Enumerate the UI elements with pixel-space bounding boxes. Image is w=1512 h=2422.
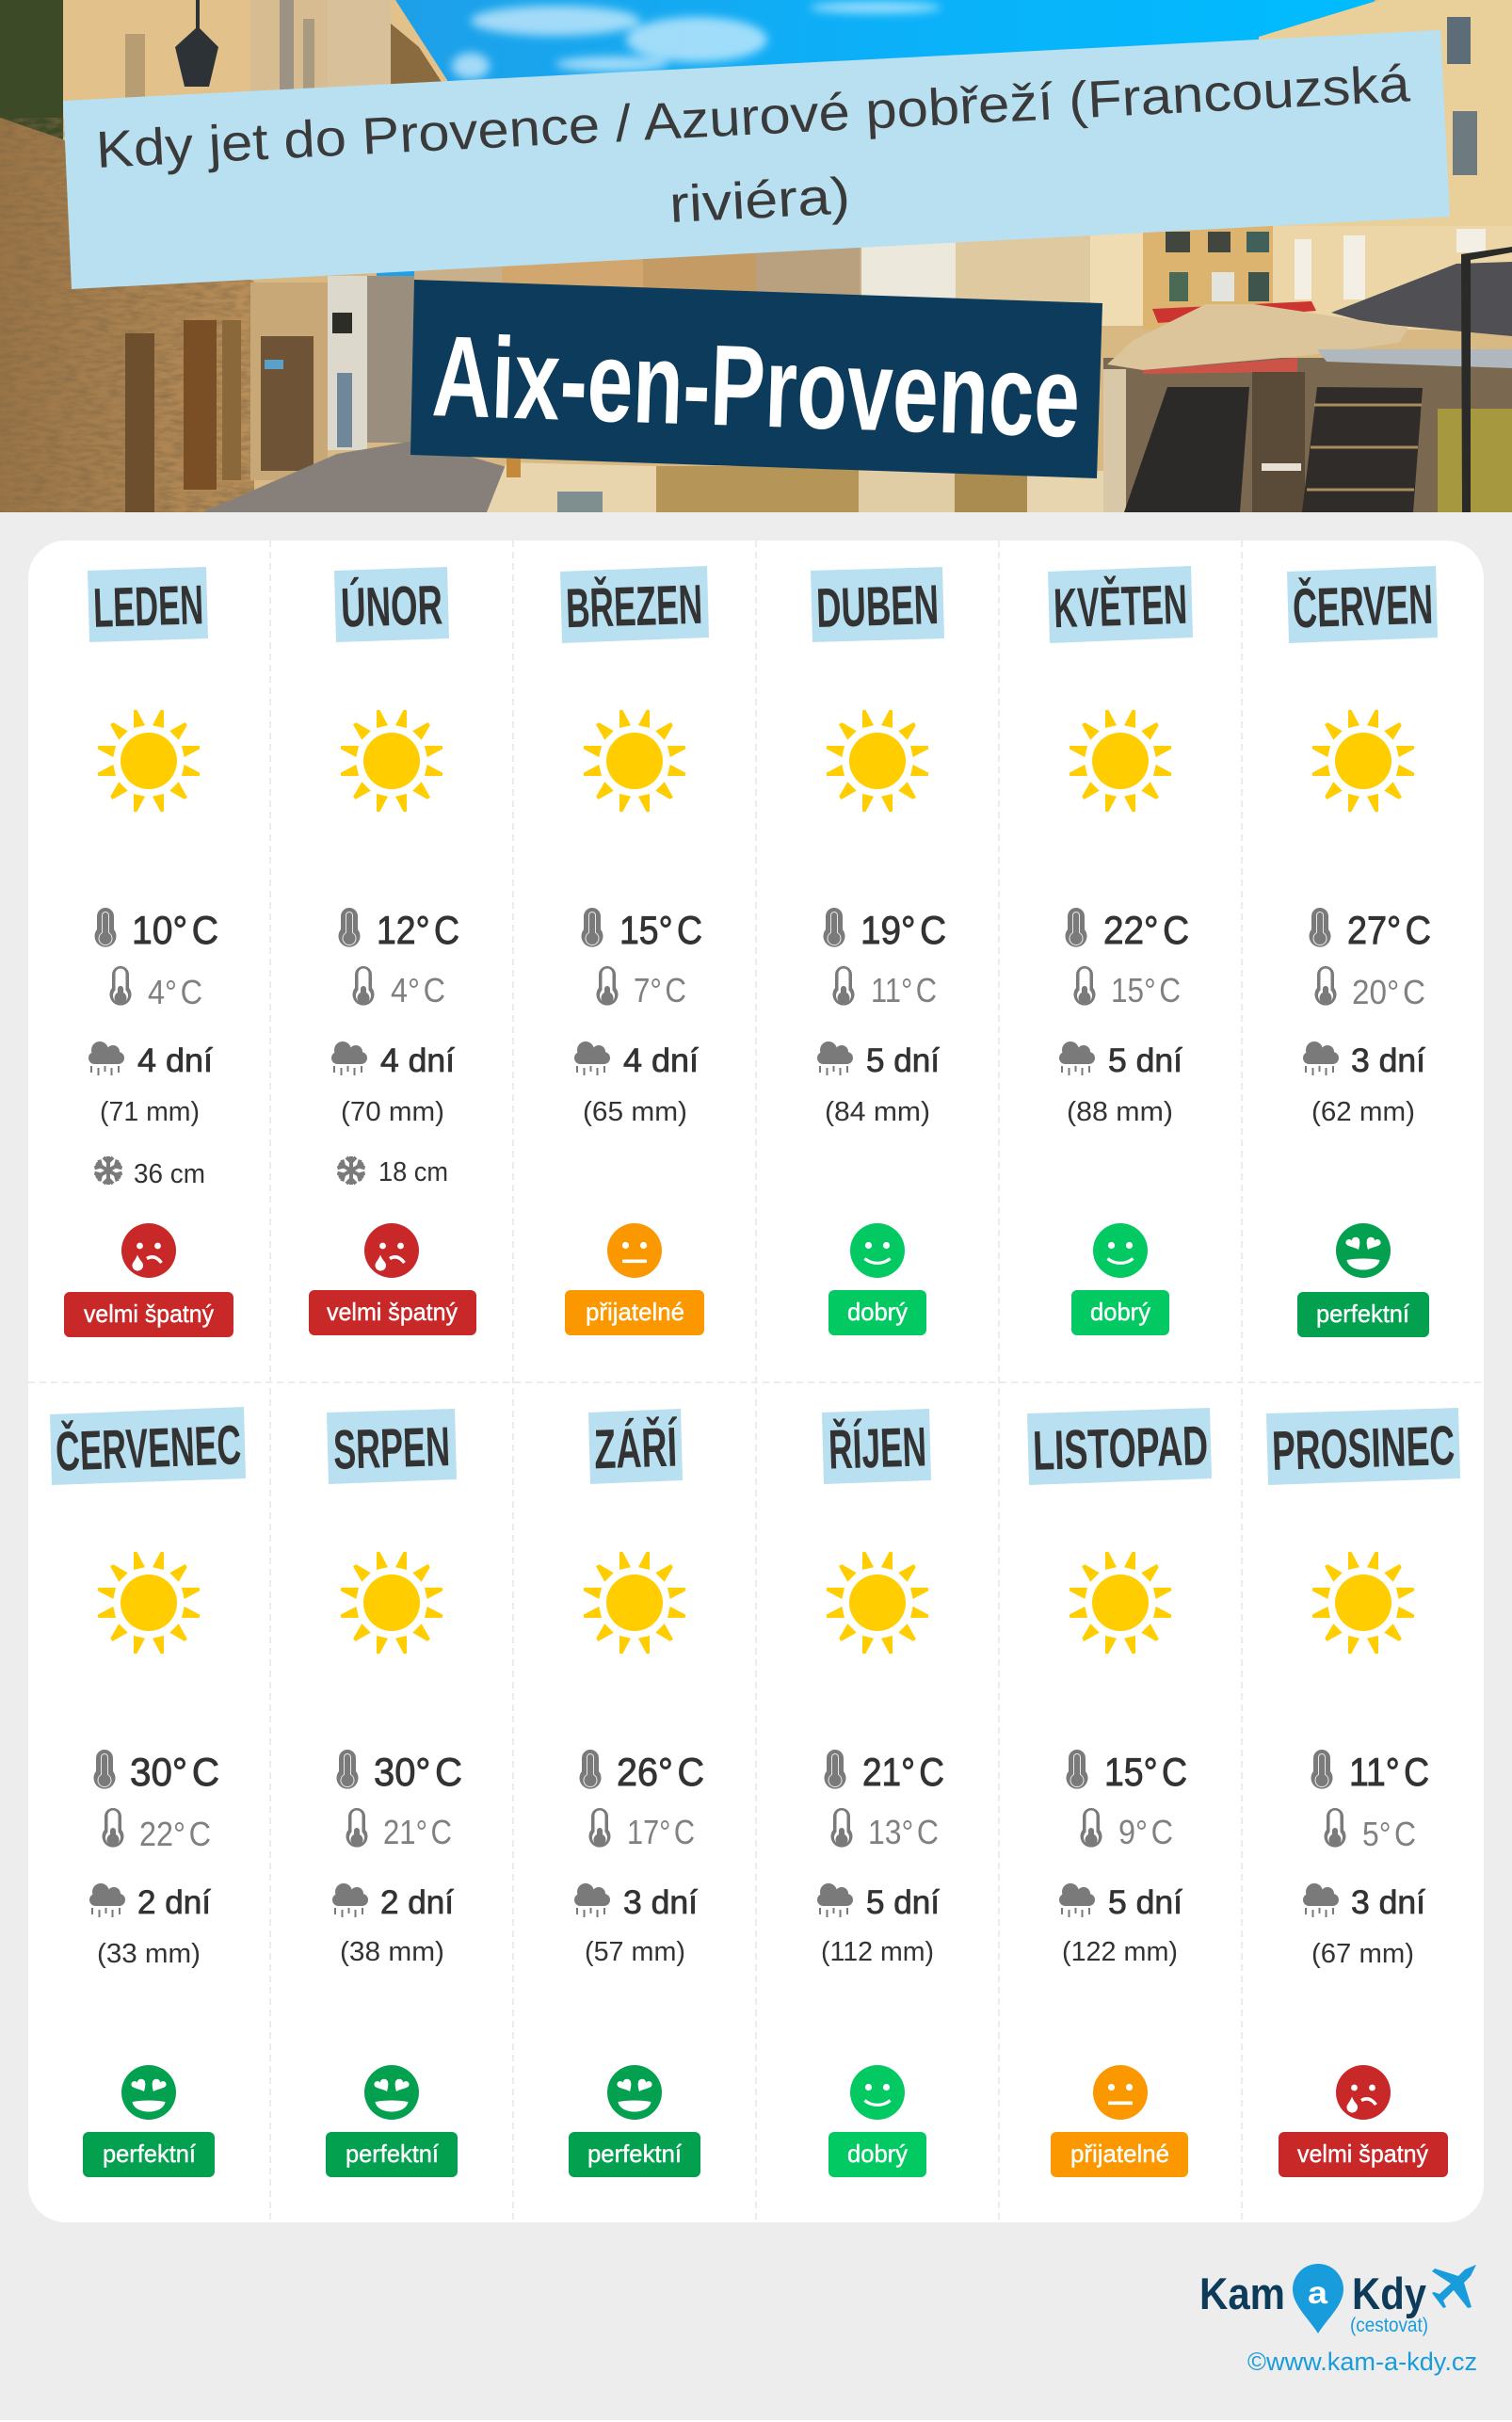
icon: rain (817, 1041, 853, 1075)
rating badge: velmi špatný (84, 1300, 214, 1328)
rating badge: perfektní (103, 2139, 197, 2168)
rating badge (569, 2132, 700, 2177)
icon: sun (827, 710, 928, 812)
rating badge: přijatelné (1070, 2139, 1169, 2168)
icon: rain (88, 1041, 124, 1075)
heading: ČERVEN (1287, 566, 1438, 643)
icon: max temperature (337, 1750, 358, 1789)
icon: min temperature (597, 966, 618, 1006)
rainy days: 2 dní (380, 1884, 454, 1921)
website credit: ©www.kam-a-kdy.cz (1247, 2348, 1477, 2376)
min temperature: 13°C (868, 1813, 939, 1851)
icon: sun (98, 1552, 200, 1654)
icon: rain (89, 1883, 125, 1917)
heading: ZÁŘÍ: ZÁŘÍ (593, 1415, 679, 1480)
icon: max temperature (825, 1750, 845, 1789)
panel: PROSINEC (1266, 1408, 1460, 2177)
icon: min temperature (346, 1808, 367, 1848)
icon: sun (1312, 710, 1414, 812)
min temperature: 20°C (1352, 973, 1425, 1011)
icon: rain (1059, 1883, 1095, 1917)
rating badge (1297, 1292, 1429, 1337)
icon: rating face (1093, 1223, 1148, 1278)
min temperature: 7°C (634, 971, 686, 1009)
max temperature: 10°C (132, 908, 218, 952)
max temperature: 12°C (377, 908, 459, 952)
icon: rain (1303, 1041, 1339, 1075)
max temperature: 11°C (1349, 1750, 1429, 1794)
precipitation: (88 mm) (1067, 1097, 1173, 1127)
heading: KVĚTEN (1048, 566, 1193, 643)
icon: rain (817, 1883, 853, 1917)
rating badge: perfektní (346, 2139, 440, 2168)
icon: rating face (1336, 1223, 1391, 1278)
min temperature: 4°C (391, 971, 445, 1009)
rating badge: velmi špatný (327, 1298, 458, 1326)
rating badge (83, 2132, 215, 2177)
rainy days: 4 dní (137, 1042, 213, 1079)
min temperature: 4°C (148, 973, 202, 1011)
rainy days: 5 dní (866, 1884, 940, 1921)
heading: LEDEN (88, 567, 208, 642)
snowfall: 18 cm (378, 1157, 448, 1187)
heading: ŘÍJEN (822, 1409, 931, 1484)
rating badge (828, 1290, 926, 1335)
icon: rain (1303, 1883, 1339, 1917)
min temperature: 9°C (1118, 1813, 1173, 1851)
min temperature: 22°C (139, 1815, 211, 1853)
icon: max temperature (339, 908, 360, 947)
precipitation: (33 mm) (97, 1939, 201, 1969)
panel: ČERVEN (1287, 566, 1438, 1337)
precipitation: (84 mm) (825, 1097, 930, 1127)
precipitation: (122 mm) (1062, 1937, 1178, 1967)
precipitation: (65 mm) (583, 1097, 687, 1127)
subtitle line 2: riviéra) (668, 166, 851, 234)
icon: min temperature (1324, 1808, 1346, 1848)
panel: ZÁŘÍ (569, 1409, 704, 2177)
icon: max temperature (1066, 1750, 1088, 1789)
min temperature: 15°C (1111, 971, 1181, 1009)
icon: rating face (607, 2065, 662, 2120)
heading: DUBEN (811, 567, 944, 642)
icon: sun (584, 1552, 685, 1654)
icon: rating face (850, 2065, 905, 2120)
icon: max temperature (1309, 908, 1331, 947)
rating badge (1051, 2132, 1188, 2177)
rainy days: 3 dní (1351, 1042, 1425, 1079)
panel: BŘEZEN (560, 566, 709, 1335)
city title banner (410, 280, 1102, 478)
icon: rating face (121, 1223, 176, 1278)
heading: ČERVENEC: ČERVENEC (55, 1413, 242, 1483)
heading: ÚNOR: ÚNOR (340, 573, 443, 639)
rating badge: dobrý (1090, 1298, 1150, 1326)
heading: BŘEZEN: BŘEZEN (565, 573, 703, 639)
icon: rating face (607, 1223, 662, 1278)
max temperature: 30°C (374, 1750, 462, 1794)
rainy days: 4 dní (380, 1042, 455, 1079)
rainy days: 4 dní (623, 1042, 699, 1079)
rating badge: perfektní (587, 2139, 683, 2168)
snowfall: 36 cm (134, 1159, 205, 1189)
icon: rating face (1093, 2065, 1148, 2120)
heading: LISTOPAD: LISTOPAD (1032, 1414, 1209, 1482)
icon: location pin: a (1308, 2275, 1328, 2310)
logo word: Kdy: Kdy (1352, 2269, 1426, 2318)
icon: max temperature (94, 1750, 115, 1789)
precipitation: (67 mm) (1311, 1939, 1414, 1969)
icon: rating face (1336, 2065, 1391, 2120)
white card panel (28, 541, 1484, 2222)
precipitation: (71 mm) (100, 1097, 200, 1127)
icon: max temperature (1066, 908, 1086, 947)
icon: rain (574, 1883, 610, 1917)
rating badge (828, 2132, 926, 2177)
panel: ŘÍJEN (817, 1409, 944, 2177)
icon: min temperature (830, 1808, 853, 1848)
icon: min temperature (589, 1808, 610, 1848)
precipitation: (38 mm) (340, 1937, 444, 1967)
icon: min temperature (832, 966, 855, 1006)
panel: DUBEN (811, 567, 946, 1335)
heading: SRPEN (327, 1409, 457, 1484)
subtitle banner (63, 30, 1450, 289)
rating badge: velmi špatný (1297, 2139, 1428, 2168)
max temperature: 19°C (861, 908, 946, 952)
icon: snow (337, 1156, 365, 1185)
icon: min temperature (1073, 966, 1096, 1006)
rainy days: 3 dní (1351, 1884, 1425, 1921)
icon: min temperature (1081, 1808, 1102, 1848)
min temperature: 21°C (383, 1813, 452, 1851)
icon: sun (341, 710, 442, 812)
max temperature: 21°C (862, 1750, 944, 1794)
logo word: Kam: Kam (1199, 2269, 1285, 2318)
min temperature: 17°C (627, 1813, 695, 1851)
min temperature: 5°C (1362, 1815, 1416, 1853)
city title: Aix-en-Provence (430, 312, 1082, 461)
rainy days: 5 dní (1108, 1884, 1182, 1921)
icon: sun (1070, 710, 1171, 812)
rating badge (565, 1290, 704, 1335)
icon: min temperature (352, 966, 375, 1006)
precipitation: (70 mm) (341, 1097, 444, 1127)
heading: DUBEN: DUBEN (815, 573, 940, 639)
precipitation: (57 mm) (585, 1937, 685, 1967)
panel: LISTOPAD (1027, 1408, 1212, 2177)
rainy days: 2 dní (137, 1884, 211, 1921)
icon: airplane (1432, 2265, 1476, 2308)
rating badge: perfektní (1316, 1300, 1410, 1328)
icon: max temperature (823, 908, 845, 947)
rating badge (1279, 2132, 1448, 2177)
icon: snow (94, 1156, 122, 1185)
heading: LISTOPAD (1027, 1408, 1212, 1485)
panel: ČERVENEC (50, 1407, 246, 2177)
heading: ZÁŘÍ (588, 1409, 683, 1484)
icon: max temperature (1311, 1750, 1333, 1789)
subtitle line 1: Kdy jet do Provence / Azurové pobřeží (Francouzská (94, 54, 1411, 179)
precipitation: (112 mm) (821, 1937, 934, 1967)
icon: sun (341, 1552, 442, 1654)
icon: min temperature (102, 1808, 124, 1848)
rating badge (64, 1292, 233, 1337)
icon: max temperature (580, 1750, 601, 1789)
heading: LEDEN: LEDEN (92, 573, 204, 639)
rainy days: 3 dní (623, 1884, 698, 1921)
icon: min temperature (109, 966, 132, 1006)
icon: rating face (364, 1223, 419, 1278)
rainy days: 5 dní (866, 1042, 940, 1079)
rating badge (309, 1290, 476, 1335)
icon: sun (1070, 1552, 1171, 1654)
logo tagline: (cestovat) (1350, 2315, 1428, 2336)
rating badge (326, 2132, 458, 2177)
icon: rating face (850, 1223, 905, 1278)
heading: SRPEN: SRPEN (332, 1415, 451, 1481)
max temperature: 15°C (1104, 1750, 1187, 1794)
precipitation: (62 mm) (1311, 1097, 1415, 1127)
max temperature: 26°C (617, 1750, 704, 1794)
max temperature: 15°C (619, 908, 702, 952)
icon: rain (574, 1041, 610, 1075)
icon: min temperature (1314, 966, 1337, 1006)
icon: rain (331, 1041, 367, 1075)
heading: BŘEZEN (560, 566, 709, 643)
header photo: Aix-en-Provence street (0, 0, 1512, 512)
heading: ÚNOR (334, 567, 449, 642)
panel: LEDEN (64, 567, 233, 1337)
icon: rating face (121, 2065, 176, 2120)
icon: rain (332, 1883, 368, 1917)
panel: ÚNOR (309, 567, 476, 1335)
icon: sun (584, 710, 685, 812)
rating badge (1071, 1290, 1169, 1335)
icon: rating face (364, 2065, 419, 2120)
logo: Kam a Kdy (1199, 2264, 1476, 2336)
min temperature: 11°C (871, 971, 937, 1009)
panel: KVĚTEN (1048, 566, 1193, 1335)
rating badge: přijatelné (586, 1298, 684, 1326)
icon: rain (1059, 1041, 1095, 1075)
icon: max temperature (94, 908, 117, 947)
rating badge: dobrý (847, 2139, 908, 2168)
heading: ŘÍJEN: ŘÍJEN (828, 1414, 927, 1481)
max temperature: 30°C (130, 1750, 219, 1794)
max temperature: 27°C (1347, 908, 1431, 952)
icon: location pin (1293, 2264, 1343, 2333)
max temperature: 22°C (1103, 908, 1189, 952)
icon: sun (827, 1552, 928, 1654)
heading: ČERVENEC (50, 1407, 246, 1485)
icon: sun (1312, 1552, 1414, 1654)
panel: SRPEN (326, 1409, 462, 2177)
heading: KVĚTEN: KVĚTEN (1053, 573, 1188, 639)
icon: max temperature (582, 908, 603, 947)
icon: sun (98, 710, 200, 812)
rainy days: 5 dní (1108, 1042, 1182, 1079)
rating badge: dobrý (847, 1298, 908, 1326)
